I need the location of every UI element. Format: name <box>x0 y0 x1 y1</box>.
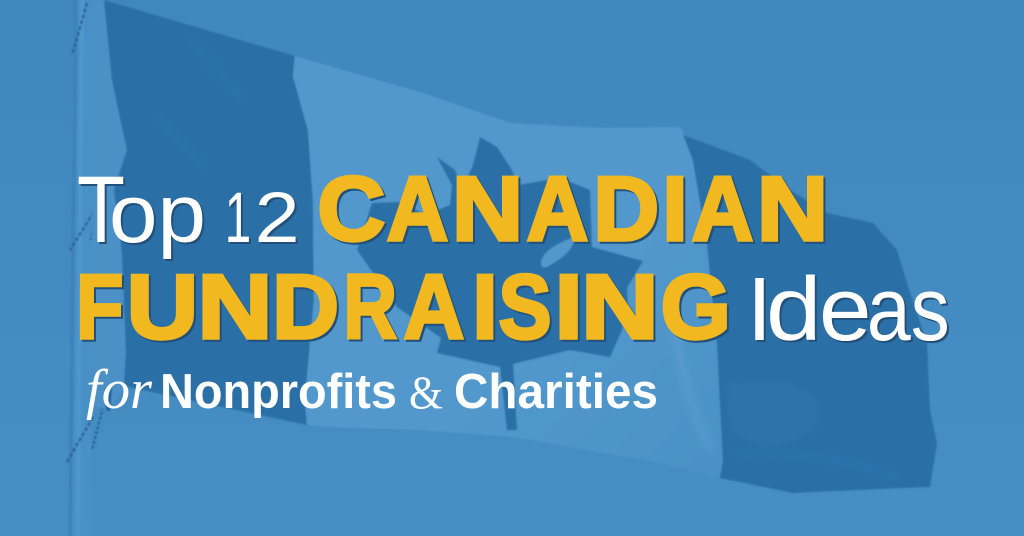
title: FUNDRAISING: N <box>581 257 659 358</box>
subtitle: & <box>409 367 443 419</box>
title: Ideas <box>747 260 950 360</box>
flag: right dark band <box>683 135 937 493</box>
title line 1: Top 12: 2 <box>255 179 300 258</box>
title: FUNDRAISING: D <box>272 257 339 358</box>
title: Ideas: s <box>911 260 950 360</box>
subtitle: Charities <box>454 365 658 419</box>
flag: maple leaf <box>357 137 643 430</box>
title: FUNDRAISING: U <box>127 257 198 358</box>
title: CANADIAN: A <box>527 159 588 260</box>
title: CANADIAN: N <box>452 159 523 260</box>
title: FUNDRAISING: N <box>198 257 272 358</box>
title line 1: Top 12: op <box>109 167 206 260</box>
title: CANADIAN: A <box>387 159 448 260</box>
title: FUNDRAISING: I <box>472 257 498 358</box>
title: Ideas: d <box>766 260 822 360</box>
title line 1: Top 12: 1 <box>225 179 251 258</box>
subtitle: Nonprofits <box>160 365 397 419</box>
title: FUNDRAISING: A <box>404 257 464 358</box>
title: Ideas: I <box>747 260 772 360</box>
subtitle: for <box>86 359 152 421</box>
flagpole with ropes <box>67 0 103 536</box>
title: FUNDRAISING: I <box>555 257 583 358</box>
title: CANADIAN: C <box>318 159 385 260</box>
title: FUNDRAISING: S <box>499 257 551 358</box>
title: CANADIAN: I <box>662 159 688 260</box>
title: Ideas: a <box>867 260 912 360</box>
flag: left dark band <box>104 0 314 425</box>
title line 1: Top 12 <box>77 157 300 263</box>
title: FUNDRAISING: F <box>76 257 123 358</box>
title: CANADIAN: N <box>757 159 828 260</box>
title: FUNDRAISING: G <box>661 257 731 358</box>
title: FUNDRAISING <box>76 257 731 358</box>
flag: white centre band <box>293 56 723 478</box>
title: FUNDRAISING: R <box>344 257 397 358</box>
title: CANADIAN <box>318 159 828 260</box>
title: CANADIAN: D <box>593 159 659 260</box>
leaf notch <box>541 237 574 267</box>
subtitle <box>86 359 658 421</box>
title: CANADIAN: A <box>692 159 753 260</box>
flag: hoist strip <box>92 0 127 411</box>
title line 1: Top 12: T <box>77 157 125 263</box>
title: Ideas: e <box>819 260 872 360</box>
